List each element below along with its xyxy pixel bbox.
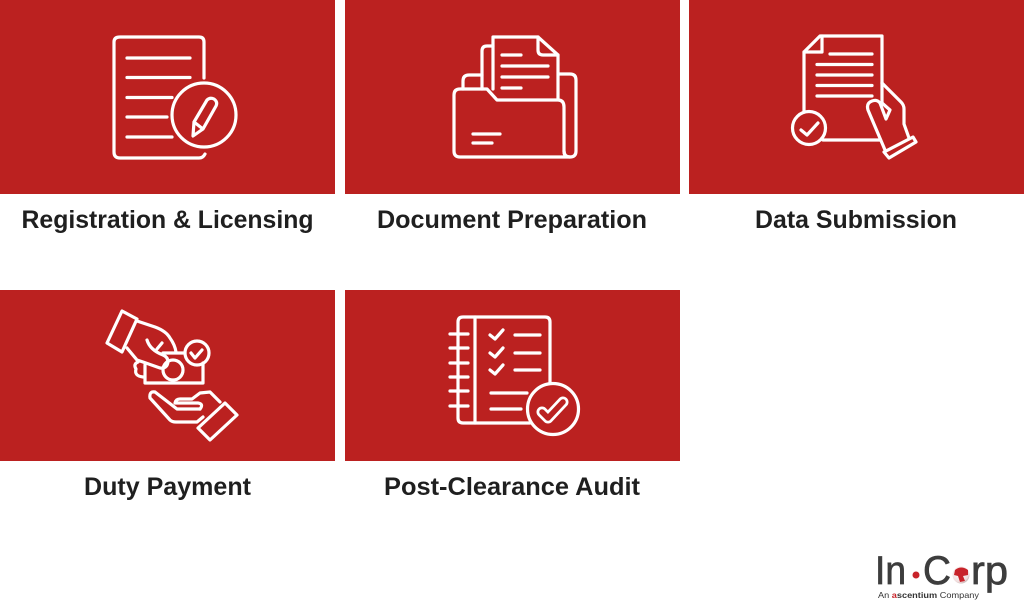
icon: document with pencil xyxy=(114,37,236,158)
logo: InCorp: C xyxy=(923,549,951,593)
heading: Post-Clearance Audit: Post-Clearance Audit xyxy=(384,473,641,501)
icon: folder with documents xyxy=(454,37,576,157)
panel: Document Preparation xyxy=(345,0,680,194)
heading: Duty Payment: Duty Payment xyxy=(84,473,252,501)
icon: hands exchanging money xyxy=(107,311,237,440)
logo: InCorp: rp xyxy=(971,549,1008,593)
panel: Post-Clearance Audit xyxy=(345,290,680,461)
icon: globe xyxy=(952,566,970,584)
logo: InCorp xyxy=(875,549,1008,600)
heading: Registration & Licensing: Registration & Licensing xyxy=(22,206,314,234)
panel: Registration & Licensing xyxy=(0,0,335,194)
logo: InCorp: An ascentium Company xyxy=(878,590,980,600)
icon: hand holding checked document xyxy=(792,36,916,158)
panel: Data Submission xyxy=(689,0,1024,194)
panel: Duty Payment xyxy=(0,290,335,461)
heading: Data Submission: Data Submission xyxy=(755,206,957,234)
icon: checklist notebook with check badge xyxy=(450,317,578,434)
logo: InCorp: In xyxy=(875,549,906,593)
heading: Document Preparation: Document Preparation xyxy=(377,206,647,234)
